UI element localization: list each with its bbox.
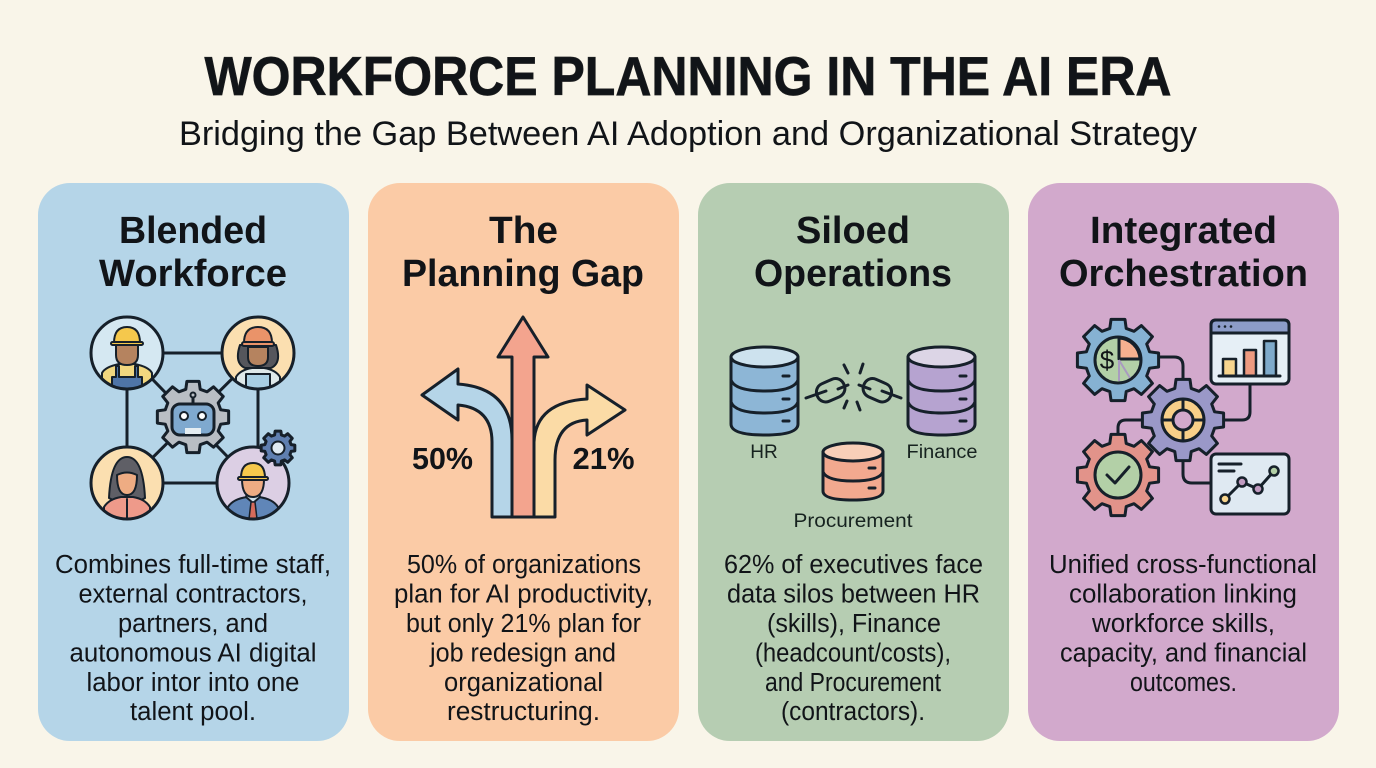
text: planning gap description: organizational xyxy=(444,669,603,697)
text: siloed operations description: 62% of executives face xyxy=(724,551,983,579)
icon: check gear xyxy=(1077,434,1159,516)
label: 50%: 50% xyxy=(412,441,473,476)
heading: integrated orchestration: Orchestration xyxy=(1059,253,1308,295)
icon: worker with yellow hat xyxy=(91,317,163,393)
text: siloed operations description: (headcount/costs), xyxy=(755,640,951,668)
text: integrated orchestration description: collaboration linking xyxy=(1069,580,1297,608)
icon: finance gear: $ xyxy=(1100,345,1115,375)
icon: small blue gear xyxy=(261,431,295,465)
text: blended workforce description: partners, and xyxy=(118,610,268,638)
icon: HR database xyxy=(731,347,798,463)
text: planning gap description: job redesign and xyxy=(429,640,616,668)
label: Procurement: Procurement xyxy=(794,511,913,532)
heading: siloed operations: Operations xyxy=(754,253,952,295)
label: Finance: Finance xyxy=(906,442,978,463)
arrow: centre red xyxy=(498,317,548,517)
panel: siloed operations xyxy=(698,183,1009,741)
text: blended workforce description: Combines full-time staff, xyxy=(55,551,331,579)
text: blended workforce description: autonomous AI digital xyxy=(70,640,316,668)
text: blended workforce description: labor intor into one xyxy=(86,669,300,697)
text: integrated orchestration description: Unified cross-functional xyxy=(1049,551,1317,579)
text: blended workforce description: talent pool. xyxy=(130,698,256,726)
text: blended workforce description xyxy=(55,551,331,726)
heading: siloed operations xyxy=(754,210,952,295)
text: siloed operations description xyxy=(724,551,983,726)
icon: central gear xyxy=(1142,379,1224,461)
text: integrated orchestration description: outcomes. xyxy=(1130,669,1237,697)
icon: worker with orange hat xyxy=(222,317,294,393)
icon: line chart card xyxy=(1211,454,1289,514)
icon: Finance database xyxy=(906,347,978,463)
icon: woman xyxy=(91,447,163,523)
icon: manager with tie xyxy=(217,447,289,523)
heading: integrated orchestration xyxy=(1059,210,1308,295)
text: siloed operations description: (contractors). xyxy=(781,698,925,726)
title: WORKFORCE PLANNING IN THE AI ERA xyxy=(204,45,1172,107)
icon: finance gear xyxy=(1077,319,1159,401)
arrow: left blue 50% xyxy=(422,369,512,517)
label: 21%: 21% xyxy=(572,441,634,476)
text: blended workforce description: external contractors, xyxy=(78,580,308,608)
text: integrated orchestration description: workforce skills, xyxy=(1091,610,1275,638)
heading: the planning gap: Planning Gap xyxy=(402,253,644,295)
heading: the planning gap: The xyxy=(489,210,558,252)
heading: integrated orchestration: Integrated xyxy=(1090,210,1277,252)
icon: bar chart window xyxy=(1211,320,1289,384)
text: planning gap description: plan for AI productivity, xyxy=(394,580,653,608)
text: planning gap description: 50% of organizations xyxy=(407,551,641,579)
text: integrated orchestration description: capacity, and financial xyxy=(1060,640,1307,668)
heading: blended workforce: Blended xyxy=(119,210,267,252)
diagram: connected gears and dashboards xyxy=(1077,319,1289,516)
subtitle: Bridging the Gap Between AI Adoption and Organizational Strategy xyxy=(179,115,1197,153)
text: planning gap description: but only 21% plan for xyxy=(406,610,641,638)
icon: robot gear xyxy=(157,381,229,453)
text: siloed operations description: data silos between HR xyxy=(727,580,980,608)
label: HR: HR xyxy=(750,442,778,463)
arrow: right yellow 21% xyxy=(534,385,625,517)
text: siloed operations description: and Procurement xyxy=(765,669,941,697)
heading: the planning gap xyxy=(402,210,644,295)
heading: blended workforce: Workforce xyxy=(99,253,287,295)
panel: the planning gap xyxy=(368,183,679,741)
text: integrated orchestration description xyxy=(1049,551,1317,697)
heading: siloed operations: Siloed xyxy=(796,210,910,252)
text: siloed operations description: (skills), Finance xyxy=(767,610,941,638)
heading: blended workforce xyxy=(99,210,287,295)
panel: integrated orchestration xyxy=(1028,183,1339,741)
text: planning gap description xyxy=(394,551,653,726)
network icon: people connected to AI robot xyxy=(91,317,295,523)
icon: broken chain link xyxy=(806,364,901,410)
icon: Procurement database xyxy=(794,443,913,532)
text: planning gap description: restructuring. xyxy=(447,698,600,726)
panel: blended workforce xyxy=(38,183,349,741)
diverging arrows chart xyxy=(412,317,634,517)
